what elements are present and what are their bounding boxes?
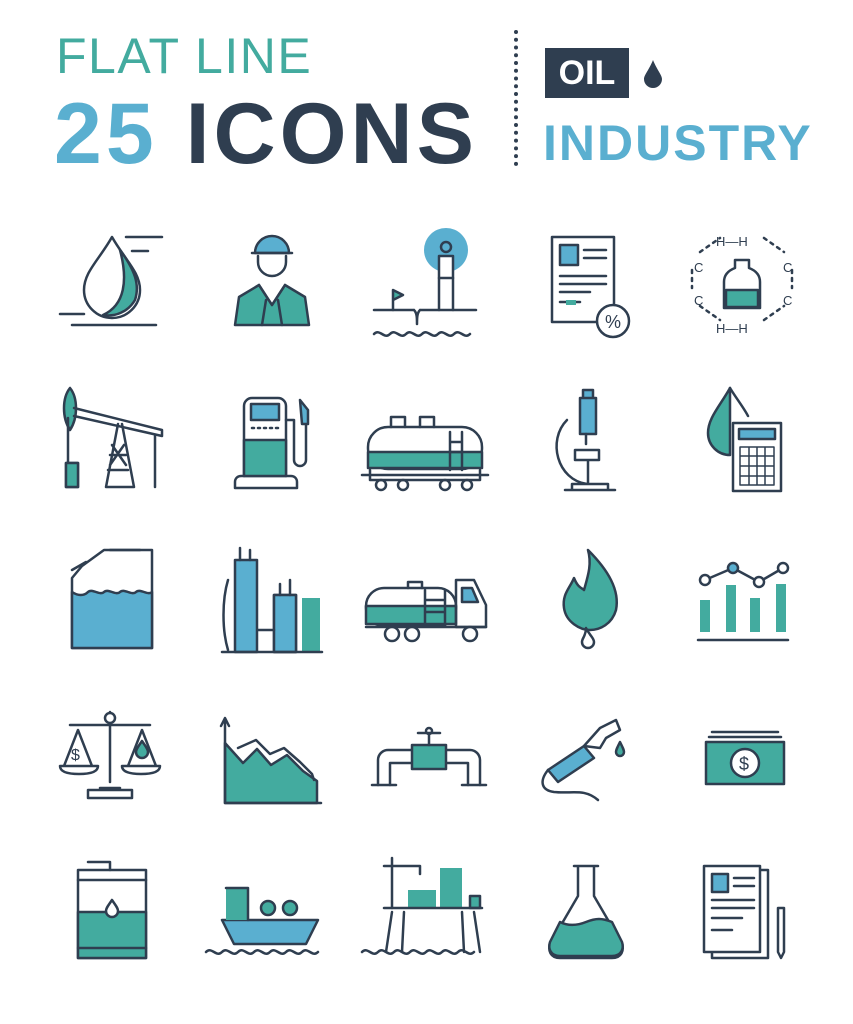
icon: drop calculator — [708, 388, 781, 491]
icon: scales — [60, 712, 160, 798]
icon: hydrocarbon — [692, 234, 792, 336]
icon: pumpjack — [64, 388, 162, 487]
dotted divider — [514, 30, 518, 166]
title: industry: INDUSTRY — [543, 115, 813, 171]
icon: hydrocarbon: C — [694, 260, 703, 275]
icon: refinery — [222, 548, 322, 652]
icon: location person — [374, 228, 476, 336]
icon: canister — [72, 550, 152, 648]
badge: OIL — [545, 48, 629, 98]
icon: microscope — [557, 390, 615, 490]
icon: flask — [549, 866, 623, 958]
icon: engineer — [235, 236, 309, 325]
icon: hydrocarbon: C — [694, 293, 703, 308]
icon: offshore platform — [362, 858, 482, 954]
icon: tanker ship — [206, 888, 318, 954]
icon: documents — [704, 866, 784, 958]
icon: hydrocarbon: C — [783, 293, 792, 308]
icon: header drop — [644, 60, 662, 88]
icon: scales: $ — [71, 747, 80, 764]
icon: hydrocarbon: C — [783, 260, 792, 275]
badge: OIL: OIL — [559, 54, 615, 92]
icon: flame — [564, 550, 617, 648]
icon: money — [706, 732, 784, 784]
icon: barrel — [78, 862, 146, 958]
title: 25 icons: 25 ICONS — [54, 86, 478, 182]
icon: hydrocarbon: H—H — [716, 234, 748, 249]
icon: rail tank car — [362, 417, 488, 490]
icon: pipeline valve — [372, 728, 486, 785]
icon: oil drop — [60, 237, 162, 325]
title: flat line: FLAT LINE — [56, 28, 312, 84]
icon: money: $ — [739, 754, 749, 774]
icon: chart — [698, 563, 788, 640]
icon: document percent — [552, 237, 629, 337]
icon: document percent: % — [605, 312, 621, 332]
icon: fuel nozzle — [543, 720, 624, 800]
icon: fuel pump — [235, 398, 308, 488]
icon: tank truck — [366, 580, 486, 641]
icon: falling chart — [221, 718, 321, 803]
icon: hydrocarbon: H—H — [716, 321, 748, 336]
